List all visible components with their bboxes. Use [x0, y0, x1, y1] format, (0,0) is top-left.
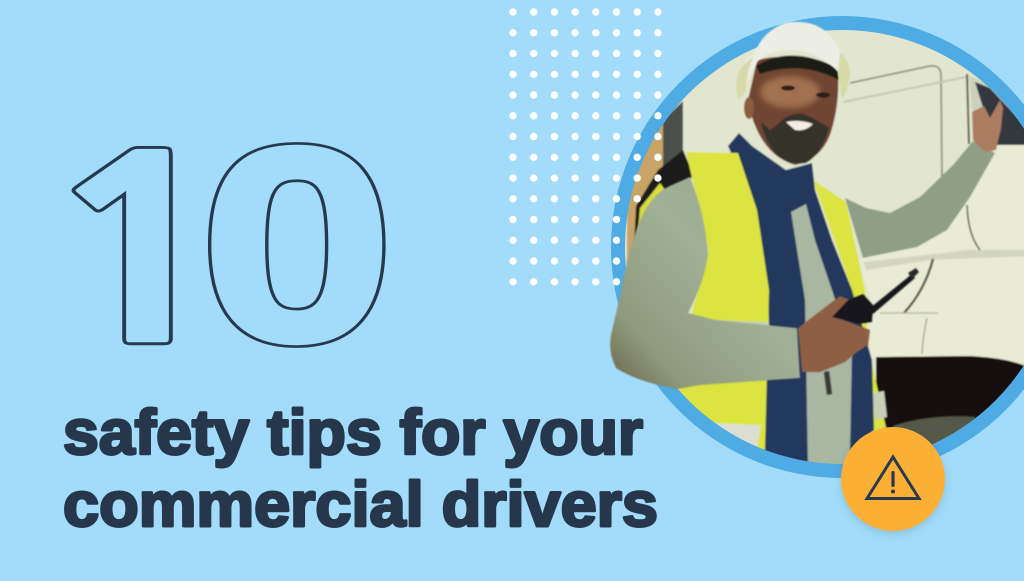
head [744, 55, 839, 165]
backpack strap [634, 150, 694, 245]
heading: safety tips for your [63, 398, 643, 468]
number 10 outline: 0 [201, 91, 393, 399]
navy gilet [728, 133, 874, 470]
warning badge [841, 427, 945, 531]
photo: driver beside truck [620, 20, 1024, 480]
hard hat [736, 22, 850, 100]
number 10 outline [38, 91, 393, 399]
dot grid [503, 2, 668, 292]
driver's arm and hand [610, 177, 919, 395]
driver's raised arm [845, 100, 1003, 258]
heading: commercial drivers [63, 470, 658, 540]
walkie talkie [824, 268, 919, 395]
number 10 outline: 1 [38, 127, 244, 380]
heading [63, 398, 658, 540]
truck cab [625, 30, 1024, 444]
photo ring [611, 16, 1024, 478]
number 10 outline: 0 [201, 91, 393, 399]
icon: warning triangle [867, 457, 919, 498]
right vest panel [813, 180, 887, 432]
left vest panel [678, 151, 770, 450]
shirt [790, 200, 852, 470]
